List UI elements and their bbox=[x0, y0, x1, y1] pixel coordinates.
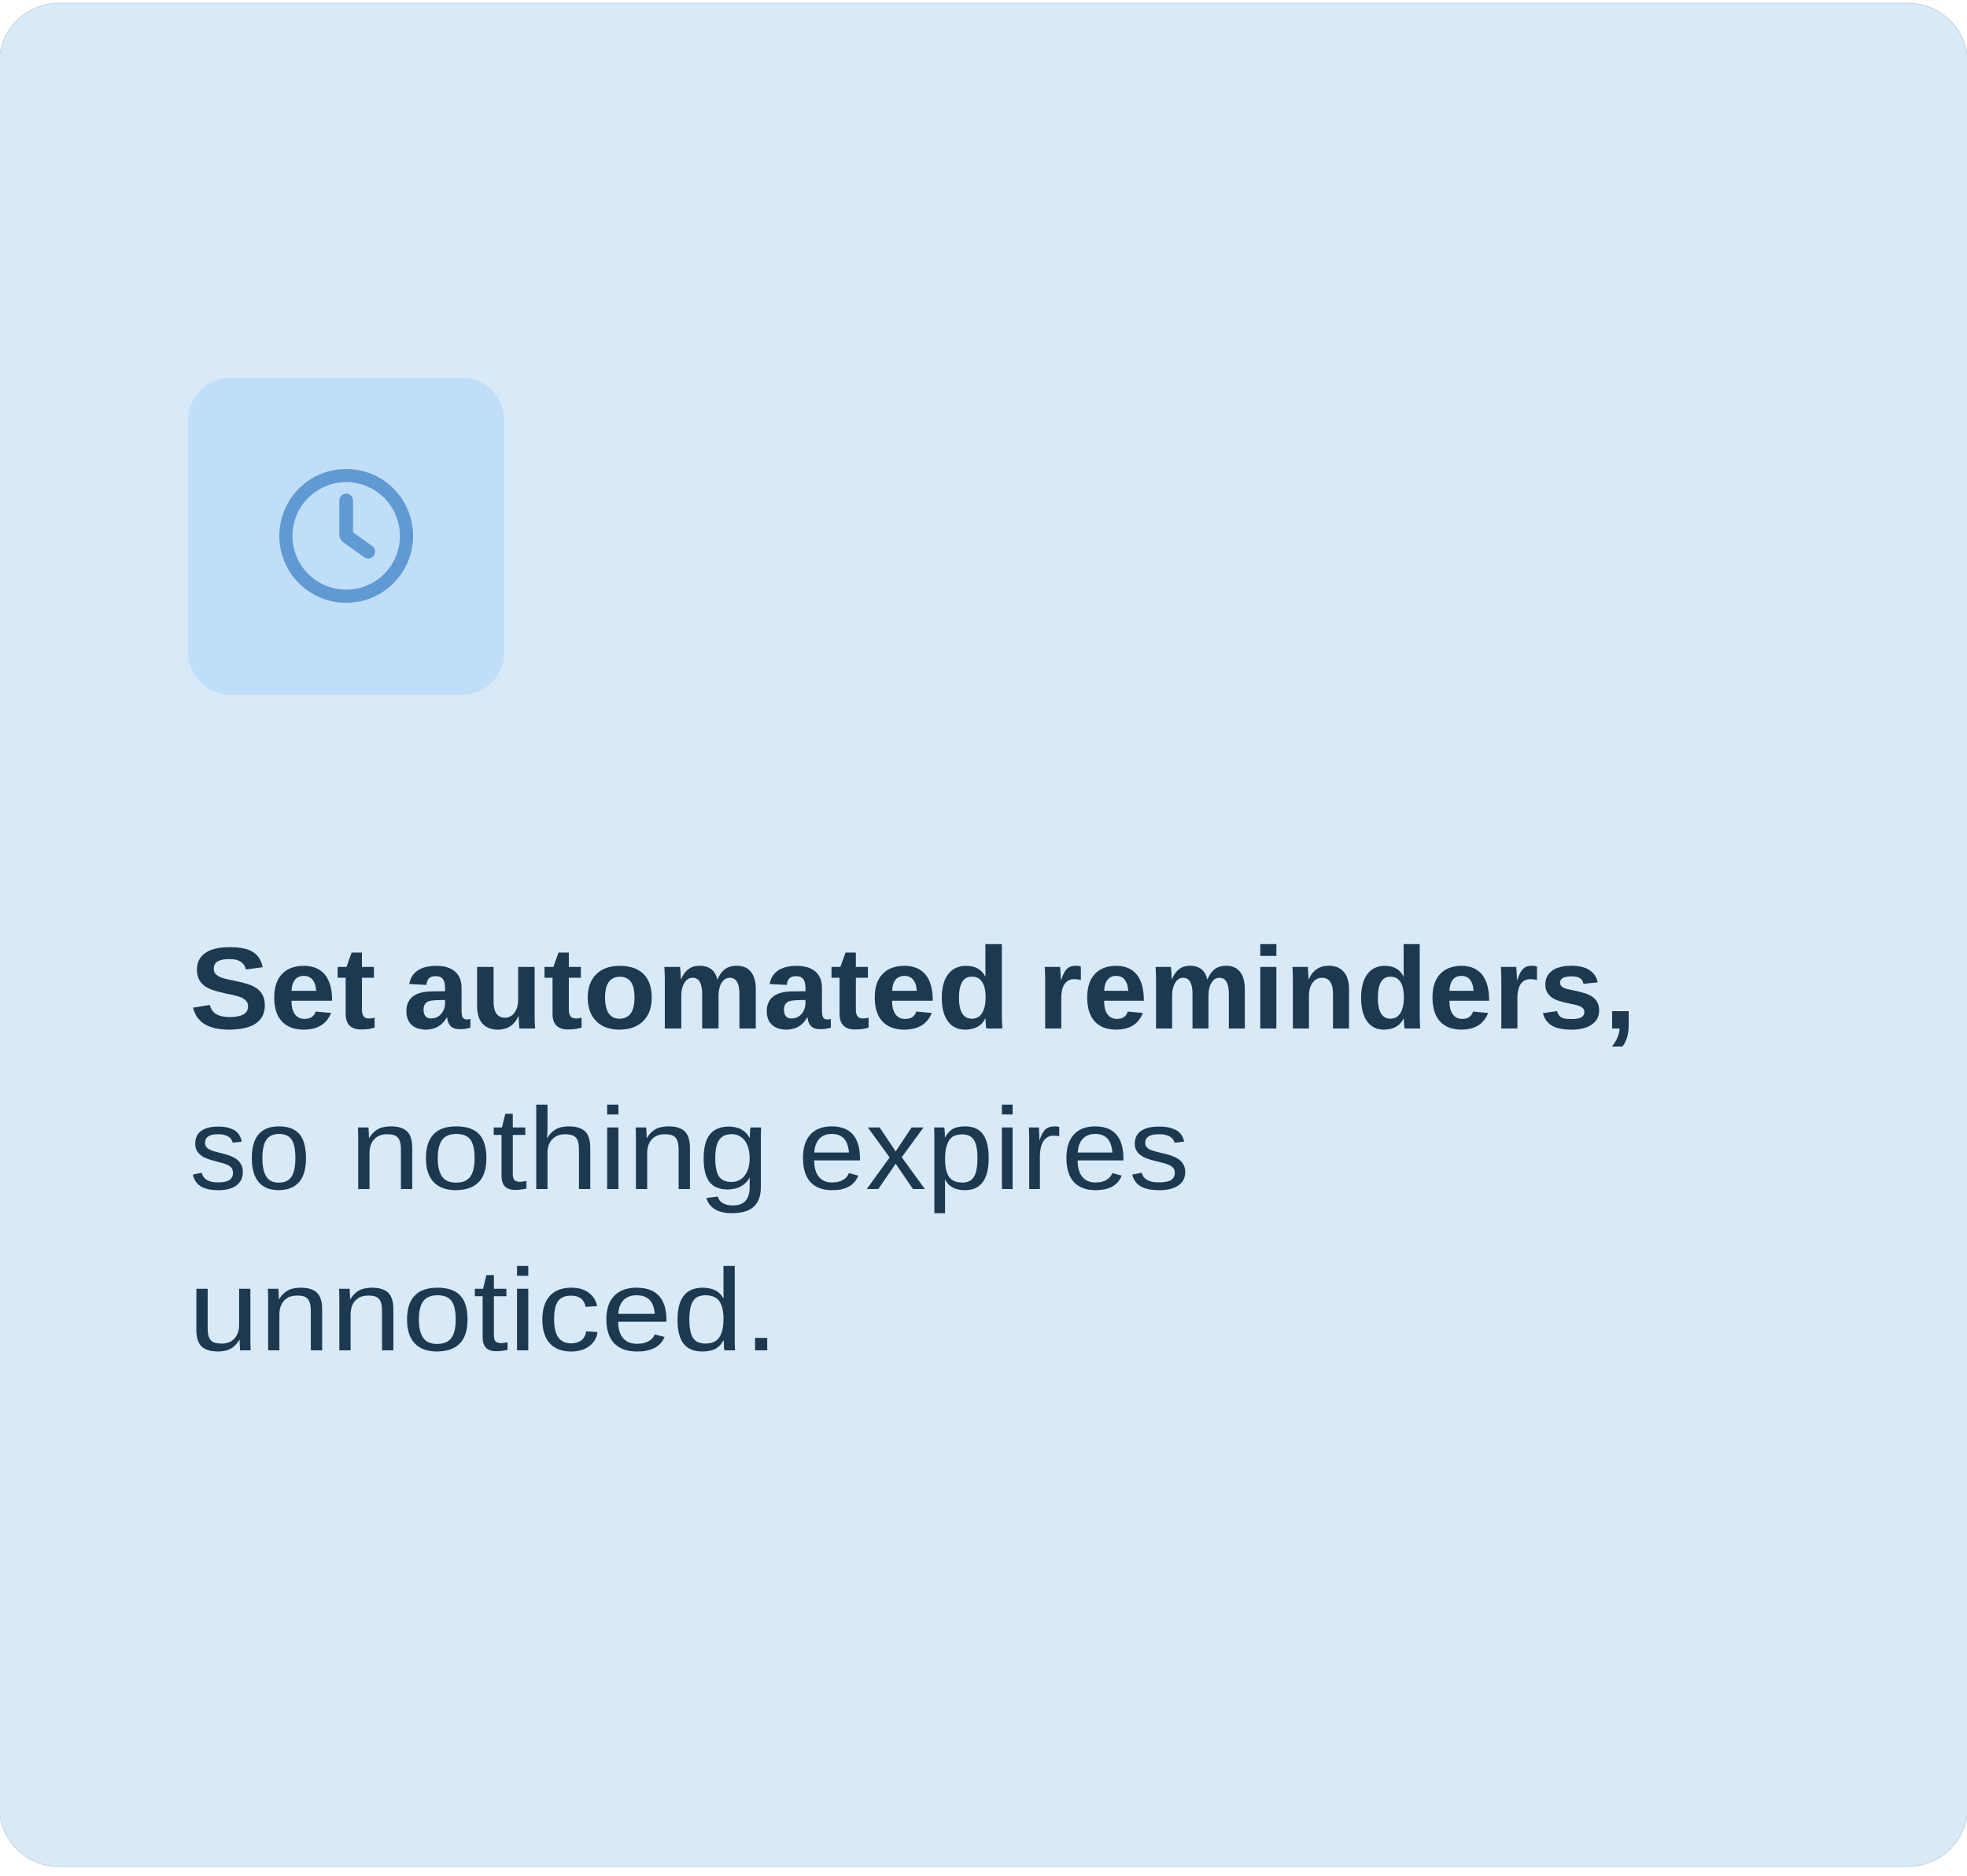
bold line: automated bbox=[403, 924, 1010, 1054]
regular line two: expires bbox=[798, 1084, 1190, 1214]
clock icon bbox=[286, 475, 407, 596]
regular line two bbox=[190, 1084, 1190, 1214]
regular line two: so bbox=[190, 1084, 311, 1214]
bold line: reminders, bbox=[1037, 924, 1637, 1054]
text block: headline message bbox=[188, 924, 1637, 1376]
icon: clock in rounded tile bbox=[188, 378, 504, 695]
regular line two: nothing bbox=[349, 1084, 769, 1214]
bold line: Set bbox=[190, 924, 376, 1054]
regular line three: unnoticed. bbox=[188, 1246, 779, 1376]
bold line bbox=[190, 924, 1637, 1054]
icon tile bbox=[188, 378, 504, 695]
